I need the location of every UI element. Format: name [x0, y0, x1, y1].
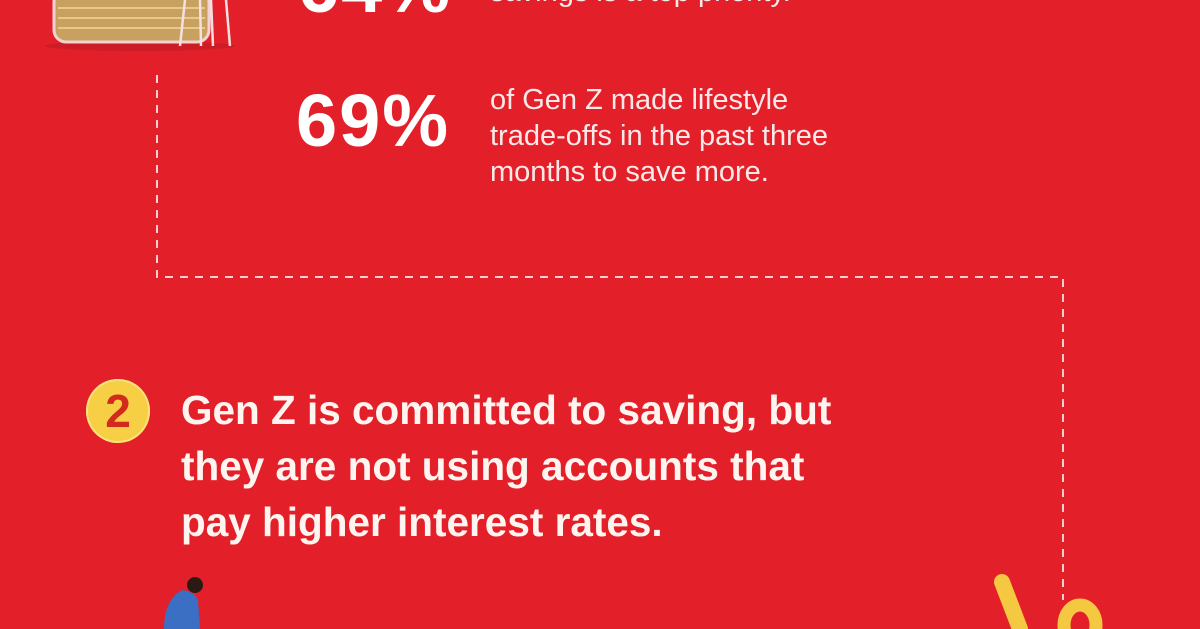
illustration: person [164, 577, 203, 629]
heading: section 2: Gen Z is committed to saving, but [181, 387, 831, 433]
icon: number 2 badge: 2 [105, 385, 131, 437]
heading: section 2 [181, 387, 831, 545]
stat: 69% [296, 79, 828, 188]
stat: 64% (cut off) [298, 0, 791, 28]
stat: 69%: of Gen Z made lifestyle [490, 84, 788, 116]
illustration: yellow percent symbol [994, 574, 1102, 629]
icon: number 2 badge [86, 379, 150, 443]
stat: 69%: months to save more. [490, 156, 769, 188]
heading: section 2: they are not using accounts that [181, 443, 804, 489]
heading: section 2: pay higher interest rates. [181, 499, 663, 545]
stat: 69%: 69% [296, 79, 450, 162]
stat: 69%: trade-offs in the past three [490, 120, 828, 152]
illustration: coin jar with ladder [45, 0, 235, 51]
